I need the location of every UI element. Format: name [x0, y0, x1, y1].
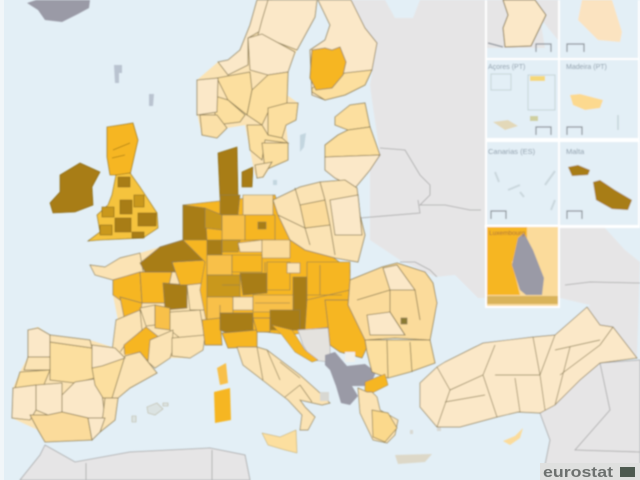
Dalmatia and Croatia — [272, 325, 318, 362]
Gotland and Danish small islands — [273, 133, 306, 185]
Bosnia — [298, 328, 330, 362]
Northern France and Benelux dark band — [140, 240, 207, 272]
Cyprus — [503, 428, 523, 445]
Poland — [273, 180, 365, 262]
Ionian and Aegean islands — [320, 392, 441, 434]
Turkey — [420, 307, 637, 427]
inset: top-left panel — [487, 0, 558, 58]
Balearic Islands — [132, 403, 168, 422]
Crete — [395, 454, 432, 464]
inset: Canarias: Canarias (ES) — [488, 147, 536, 156]
North Africa land — [20, 445, 250, 480]
inset: Luxembourg — [485, 225, 560, 308]
Sardinia — [214, 388, 231, 423]
inset: Madeira — [560, 60, 638, 138]
inset: top-right panel — [560, 0, 638, 58]
Iberia — [12, 327, 157, 442]
Great Britain — [88, 123, 158, 241]
Norway — [218, 0, 272, 75]
Caucasus sea corner — [605, 228, 640, 262]
non-EU land: eastern Europe — [351, 0, 640, 413]
Serbia — [325, 300, 368, 358]
inset: Malta — [560, 142, 638, 225]
Greece — [358, 388, 398, 443]
Italy north — [202, 313, 270, 348]
Finland — [310, 0, 377, 100]
Finland highlighted orange region — [310, 47, 346, 90]
Germany and central Europe mosaic — [183, 195, 350, 335]
inset: Madeira: Madeira (PT) — [566, 64, 607, 71]
Black Sea — [436, 275, 590, 345]
eurostat logo — [540, 463, 640, 480]
Albania, Macedonia, Kosovo — [325, 352, 376, 405]
Sweden north — [258, 0, 317, 50]
Iceland — [27, 0, 90, 22]
Scandinavia — [197, 0, 317, 178]
France — [90, 240, 207, 368]
inset: Luxembourg: Luxembourg — [489, 230, 526, 237]
insets frame — [485, 0, 640, 228]
inset: Malta: Malta — [566, 147, 585, 156]
Sicily — [262, 430, 297, 453]
Italy peninsula — [237, 347, 330, 430]
inset: Azores: Açores (PT) — [488, 64, 525, 71]
Denmark — [218, 147, 253, 197]
Baltic states — [325, 103, 380, 188]
Romania — [348, 263, 437, 340]
Bulgaria — [365, 340, 435, 378]
inset: Canarias — [487, 142, 558, 225]
Corsica — [217, 363, 228, 385]
Middle East land — [540, 360, 640, 480]
small northern islands — [114, 65, 154, 106]
Greece north — [365, 374, 388, 393]
Ireland — [50, 163, 100, 213]
inset: Azores — [487, 60, 558, 138]
